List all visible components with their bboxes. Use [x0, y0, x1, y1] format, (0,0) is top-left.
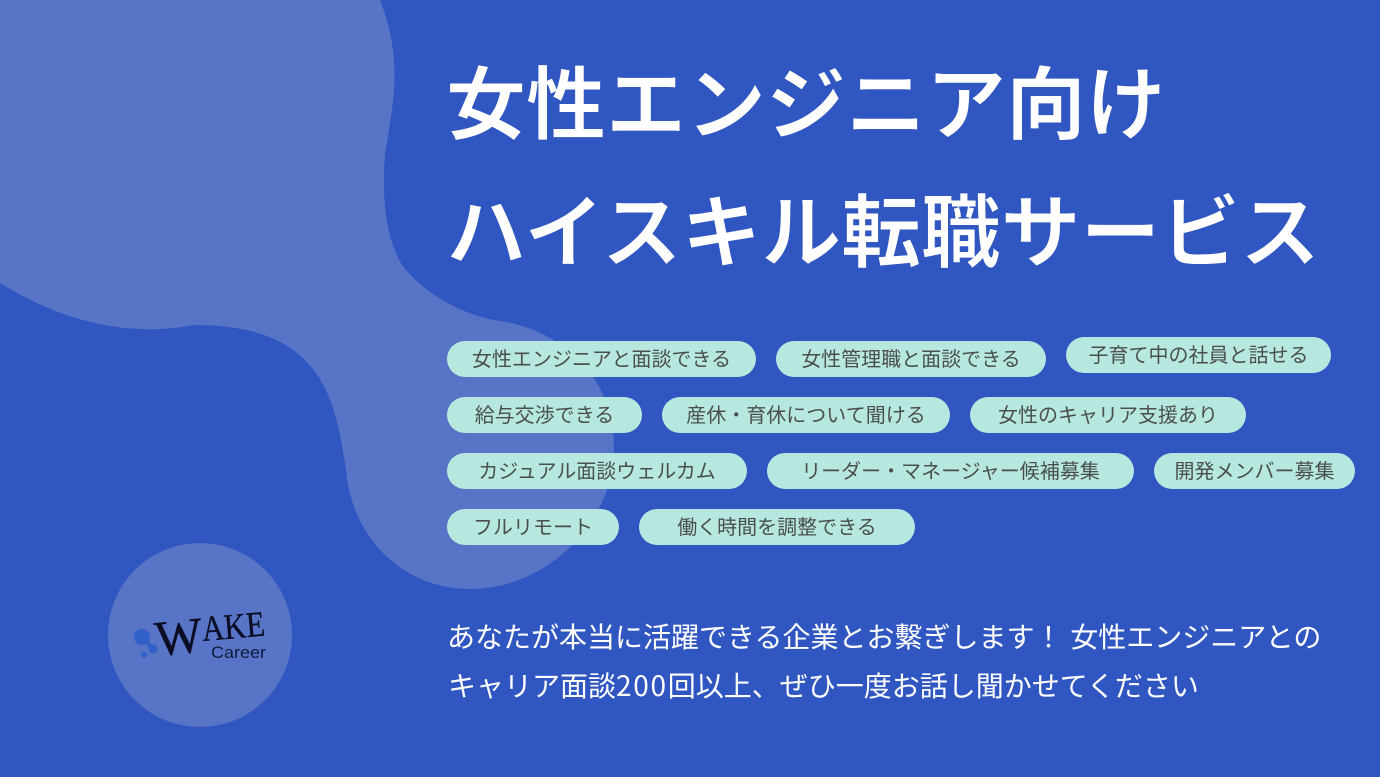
tag: 女性管理職と面談できる	[776, 341, 1046, 377]
tag: 開発メンバー募集	[1154, 453, 1355, 489]
tag: 子育て中の社員と話せる: 子育て中の社員と話せる	[1088, 345, 1308, 367]
description line 1: あなたが本当に活躍できる企業とお繫ぎします！ 女性エンジニアとの	[447, 622, 1321, 653]
tag: 女性のキャリア支援あり: 女性のキャリア支援あり	[998, 405, 1218, 427]
tag: フルリモート: フルリモート	[473, 517, 593, 539]
tag: カジュアル面談ウェルカム	[447, 453, 747, 489]
description line 2: キャリア面談200回以上、ぜひ一度お話し聞かせてください	[448, 665, 1199, 705]
tag: 働く時間を調整できる: 働く時間を調整できる	[677, 517, 877, 539]
logo: WAKE Career: Career	[211, 643, 266, 662]
tag: カジュアル面談ウェルカム: カジュアル面談ウェルカム	[478, 461, 716, 483]
tag: 女性管理職と面談できる: 女性管理職と面談できる	[801, 349, 1021, 371]
tag: 産休・育休について聞ける: 産休・育休について聞ける	[686, 405, 926, 427]
tag: 子育て中の社員と話せる	[1066, 337, 1331, 373]
logo circle	[108, 543, 292, 727]
tag: リーダー・マネージャー候補募集	[767, 453, 1134, 489]
tag: 給与交渉できる	[447, 397, 642, 433]
tag: 働く時間を調整できる	[639, 509, 915, 545]
logo: WAKE Career	[134, 604, 266, 667]
tag: 女性エンジニアと面談できる	[447, 341, 756, 377]
tag: 産休・育休について聞ける	[662, 397, 950, 433]
title line 2: ハイスキル転職サービス	[446, 189, 1320, 278]
title line 1: 女性エンジニア向け	[446, 61, 1166, 150]
tag: フルリモート	[447, 509, 619, 545]
tag: リーダー・マネージャー候補募集: リーダー・マネージャー候補募集	[801, 461, 1100, 483]
tag: 女性エンジニアと面談できる: 女性エンジニアと面談できる	[472, 349, 731, 371]
logo: WAKE Career: W	[152, 606, 206, 667]
tag: 女性のキャリア支援あり	[970, 397, 1246, 433]
tag: 給与交渉できる: 給与交渉できる	[475, 405, 614, 427]
tag: 開発メンバー募集: 開発メンバー募集	[1174, 461, 1334, 483]
logo: WAKE Career: AKE	[200, 604, 266, 649]
